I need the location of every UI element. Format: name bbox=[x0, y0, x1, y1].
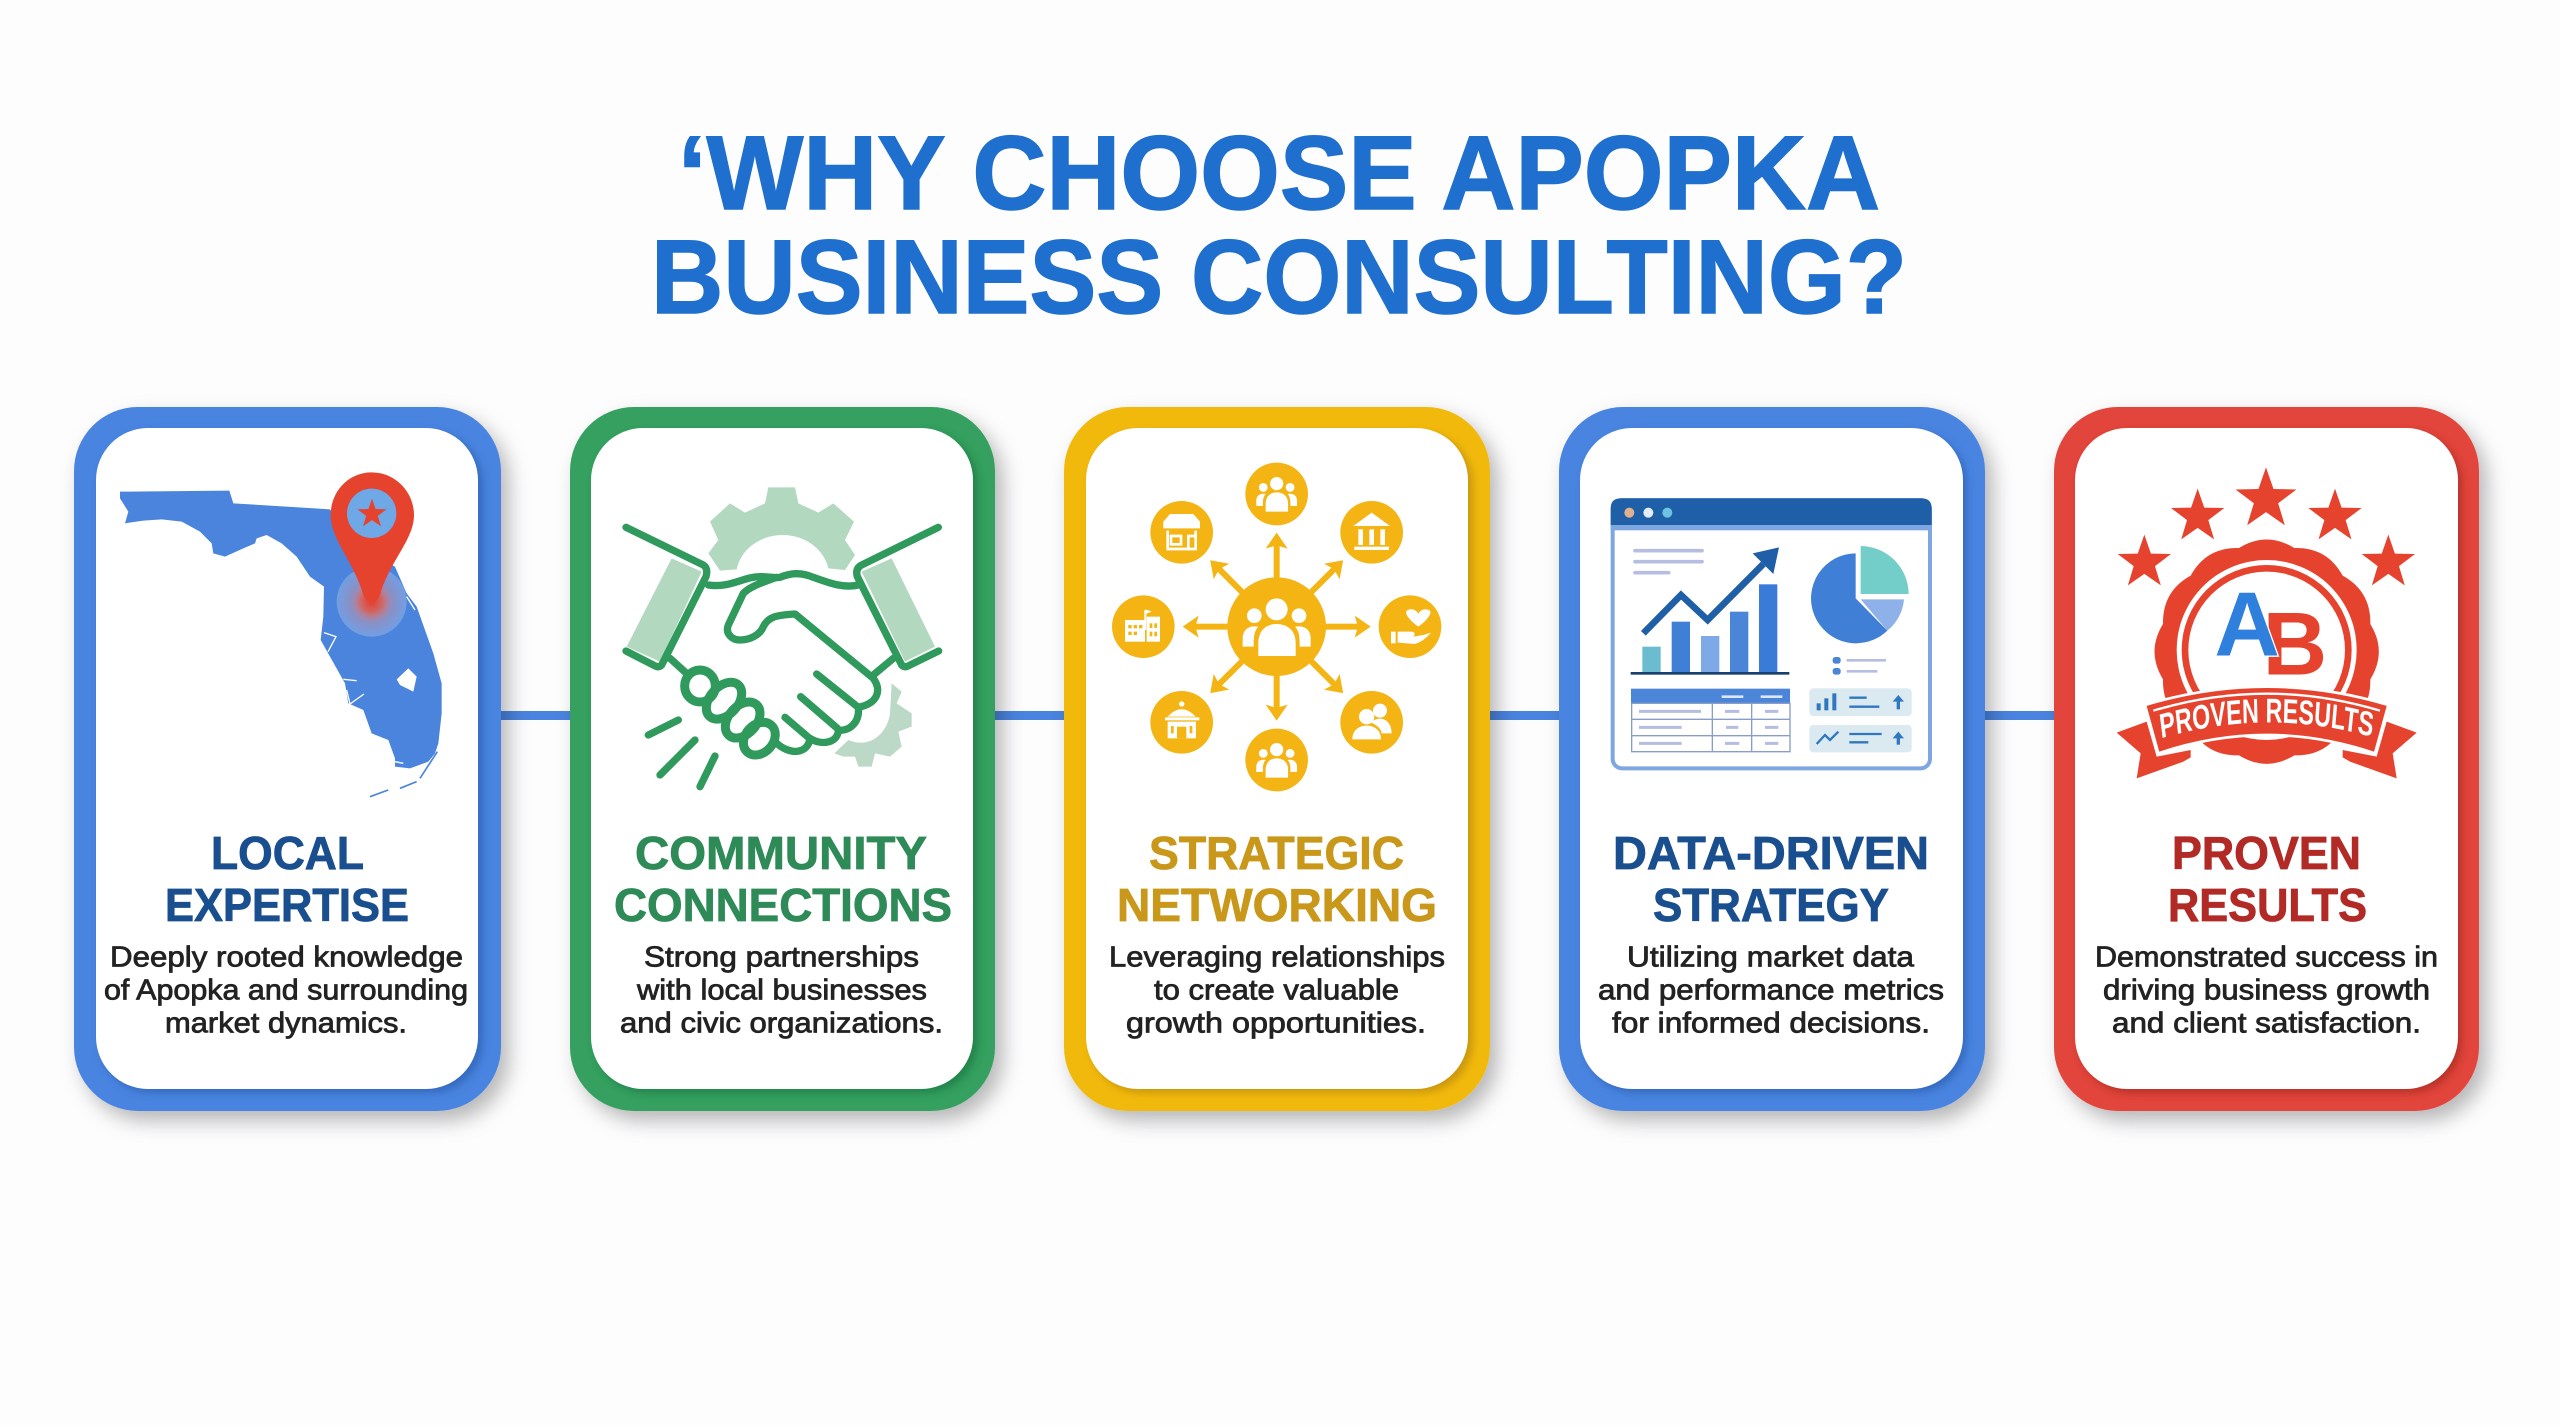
icon: proven results badge bbox=[2116, 468, 2417, 778]
heading: data-driven strategy: DATA-DRIVEN bbox=[1613, 827, 1929, 879]
text: strategic networking description: growth opportunities. bbox=[1126, 1008, 1426, 1040]
heading: data-driven strategy bbox=[1613, 827, 1929, 931]
text: proven results description bbox=[2095, 942, 2438, 1040]
icon: analytics dashboard bbox=[1611, 498, 1932, 768]
heading: proven results bbox=[2168, 827, 2367, 931]
text: community connections description bbox=[620, 942, 943, 1040]
heading: strategic networking: NETWORKING bbox=[1117, 879, 1437, 931]
heading: local expertise: LOCAL bbox=[211, 827, 364, 879]
text: community connections description: Strong partnerships bbox=[644, 942, 919, 974]
title bbox=[651, 115, 1907, 336]
heading: local expertise bbox=[165, 827, 409, 931]
panel: local expertise bbox=[74, 407, 501, 1111]
icon: proven results badge: A bbox=[2214, 574, 2280, 675]
heading: proven results: PROVEN bbox=[2172, 827, 2361, 879]
heading: community connections: CONNECTIONS bbox=[614, 879, 952, 931]
text: strategic networking description: Leveraging relationships bbox=[1109, 942, 1445, 974]
text: community connections description: with local businesses bbox=[636, 974, 927, 1006]
connector lines bbox=[495, 711, 2060, 720]
heading: local expertise: EXPERTISE bbox=[165, 879, 409, 931]
text: strategic networking description bbox=[1109, 942, 1445, 1040]
icon: florida map with pin bbox=[120, 472, 442, 797]
text: data-driven strategy description: Utilizing market data bbox=[1627, 942, 1915, 974]
heading: proven results: RESULTS bbox=[2168, 879, 2367, 931]
heading: community connections bbox=[614, 827, 952, 931]
panel: data-driven strategy bbox=[1559, 407, 1985, 1111]
title: ‘WHY CHOOSE APOPKA bbox=[678, 115, 1880, 232]
panel: community connections bbox=[570, 407, 995, 1111]
title: BUSINESS CONSULTING? bbox=[651, 219, 1907, 336]
heading: data-driven strategy: STRATEGY bbox=[1653, 879, 1889, 931]
icon: proven results badge: B bbox=[2263, 594, 2327, 694]
text: local expertise description: market dynamics. bbox=[165, 1008, 407, 1040]
icon: handshake with gears bbox=[626, 487, 939, 787]
text: community connections description: and civic organizations. bbox=[620, 1008, 943, 1040]
text: local expertise description: Deeply rooted knowledge bbox=[110, 942, 463, 974]
panel: proven results bbox=[2050, 406, 2498, 1132]
heading: strategic networking bbox=[1117, 827, 1437, 931]
text: data-driven strategy description bbox=[1598, 942, 1944, 1040]
text: data-driven strategy description: for informed decisions. bbox=[1612, 1008, 1930, 1040]
text: proven results description: driving business growth bbox=[2103, 974, 2430, 1006]
text: local expertise description: of Apopka and surrounding bbox=[104, 974, 468, 1006]
text: proven results description: Demonstrated success in bbox=[2095, 942, 2438, 974]
text: data-driven strategy description: and performance metrics bbox=[1598, 974, 1944, 1006]
icon: proven results badge: PROVEN RESULTS bbox=[2160, 698, 2373, 738]
heading: strategic networking: STRATEGIC bbox=[1149, 827, 1404, 879]
text: strategic networking description: to create valuable bbox=[1154, 974, 1399, 1006]
text: local expertise description bbox=[104, 942, 468, 1040]
icon: network diagram bbox=[1112, 463, 1441, 791]
text: proven results description: and client satisfaction. bbox=[2112, 1008, 2421, 1040]
panel: strategic networking bbox=[1064, 407, 1490, 1111]
heading: community connections: COMMUNITY bbox=[635, 827, 927, 879]
